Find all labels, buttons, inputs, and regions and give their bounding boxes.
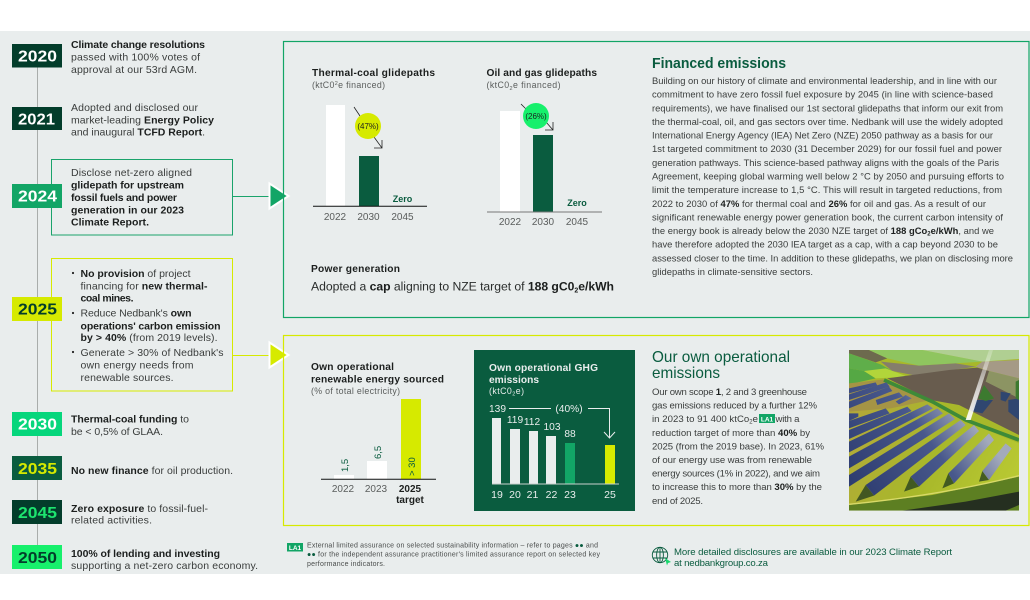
power generation: 2 <box>574 288 578 295</box>
timeline 2021: market-leading Energy Policy <box>71 114 214 126</box>
footer: LA1 limited assurance note: LA1 <box>289 545 302 552</box>
chart: own operational GHG emissions: 20 <box>509 489 521 501</box>
timeline 2030: be < 0,5% of GLAA. <box>71 426 163 438</box>
timeline 2021 <box>12 102 214 138</box>
text: own operational emissions body: gas emissions reduced by a further 12% <box>652 401 817 412</box>
chart: own operational GHG emissions: 139 <box>489 404 506 415</box>
timeline 2035 <box>12 456 233 480</box>
timeline 2045 <box>12 500 208 526</box>
timeline 2024 callout: fossil fuels and power <box>71 192 177 204</box>
chart: renewable energy sourced: 2023 <box>365 484 388 495</box>
timeline 2045: 2045 <box>18 505 57 522</box>
chart: own operational GHG emissions: 21 <box>527 489 538 501</box>
timeline 2030 <box>12 412 189 438</box>
text: financed emissions body: International Energy Agency (IEA) Net Zero (NZE) 2050 pathway as a basis for our <box>652 130 993 141</box>
timeline axis <box>36 60 38 550</box>
text: own operational emissions body: in 2023 to 91 400 ktCo <box>652 414 749 425</box>
text: own operational emissions body: 2025 (from the 2019 base). In 2023, 61% <box>652 441 824 452</box>
chart: thermal-coal glidepaths <box>312 68 435 223</box>
chart: own operational GHG emissions: 19 <box>491 489 503 501</box>
chart: thermal-coal glidepaths: e financed) <box>338 80 385 90</box>
text: financed emissions body: e/kWh <box>931 225 959 236</box>
chart: own operational GHG emissions: 112 <box>524 417 540 428</box>
chart: renewable energy sourced: 2022 <box>332 484 355 495</box>
text: financed emissions body: generation pathways. This science-based pathway aligns with the goals of the Paris <box>652 157 999 168</box>
chart: oil and gas glidepaths: (26%) <box>525 112 547 121</box>
text: financed emissions body: 1st targeted commitment to 2030 (31 December 2029) for our fossil fuel and power <box>652 143 1002 154</box>
timeline 2030: 2030 <box>18 416 57 434</box>
text: financed emissions body: glidepaths in climate-sensitive sectors. <box>652 266 813 277</box>
timeline 2025 callout: Generate > 30% of Nedbank's <box>80 347 224 359</box>
timeline 2020: passed with 100% votes of <box>71 52 200 64</box>
text: own operational emissions body: reduction target of more than 40% by <box>652 428 810 439</box>
timeline 2020: 2020 <box>18 48 57 66</box>
timeline 2024 callout: Disclose net-zero aligned <box>71 167 192 179</box>
text: own operational emissions body <box>652 387 824 507</box>
timeline 2024 callout: 2024 <box>18 188 57 206</box>
text: financed emissions body: requirements), we have finalised our 1st sectoral glidepaths that inform our exit from <box>652 102 1003 113</box>
text: own operational emissions body: energy sources (1% in 2022), and we aim <box>652 469 820 480</box>
text: financed emissions body: have therefore adopted the 2030 IEA target as a cap, with a cap beyond 2030 to be <box>652 239 998 250</box>
chart: oil and gas glidepaths: Zero <box>567 198 587 208</box>
footer: disclosure note: at nedbankgroup.co.za <box>674 558 769 569</box>
chart: renewable energy sourced: renewable energy sourced <box>311 375 444 386</box>
chart: thermal-coal glidepaths: 2022 <box>324 212 347 223</box>
arrow: 2024 to financed emissions <box>232 184 288 208</box>
chart: own operational GHG emissions: 2 <box>512 392 515 398</box>
chart: renewable energy sourced: 2025 <box>399 484 422 495</box>
timeline 2024 callout: generation in our 2023 <box>71 204 184 216</box>
chart: oil and gas glidepaths: 2022 <box>499 217 522 228</box>
timeline 2025 callout: operations' carbon emission <box>80 320 220 332</box>
timeline 2035: No new finance for oil production. <box>71 465 233 477</box>
chart: oil and gas glidepaths: 2045 <box>566 217 589 228</box>
chart: renewable energy sourced: > 30 <box>407 457 418 476</box>
heading: our own operational emissions: Our own operational <box>652 349 790 366</box>
text: own operational emissions body: e <box>753 414 758 425</box>
timeline 2025 callout: by > 40% (from 2019 levels). <box>80 332 218 344</box>
text: financed emissions body: 2022 to 2030 of 47% for thermal coal and 26% for oil and gas. As a result of our <box>652 198 986 209</box>
timeline 2021: 2021 <box>18 112 55 128</box>
panel: own operational emissions <box>284 336 1029 566</box>
chart: renewable energy sourced <box>311 362 444 506</box>
text: own operational emissions body: Our own scope 1, 2 and 3 greenhouse <box>652 387 807 398</box>
chart: own operational GHG emissions: 119 <box>507 415 523 426</box>
timeline 2021: and inaugural TCFD Report. <box>71 126 205 138</box>
timeline 2045: Zero exposure to fossil-fuel- <box>71 503 208 515</box>
timeline 2050: supporting a net-zero carbon economy. <box>71 560 258 572</box>
text: own operational emissions body: of our energy use was from renewable <box>652 455 812 466</box>
text: financed emissions body: , and we <box>958 225 994 236</box>
timeline 2050: 100% of lending and investing <box>71 548 220 560</box>
chart: renewable energy sourced: 6,5 <box>373 446 384 459</box>
timeline 2024 callout: glidepath for upstream <box>71 180 184 192</box>
text: financed emissions body: significant renewable energy power generation book, the current carbon intensity of <box>652 211 1003 222</box>
chart: own operational GHG emissions <box>474 350 635 511</box>
timeline 2025 callout: coal mines. <box>80 293 134 305</box>
text: financed emissions body: limit the temperature increase to 1,5 °C. This will result in targeted reductions, from <box>652 184 1002 195</box>
power generation <box>311 264 614 295</box>
text: own operational emissions body: with a <box>774 414 800 425</box>
chart: oil and gas glidepaths: e financed) <box>513 80 561 90</box>
timeline 2025 callout <box>12 258 232 391</box>
chart: own operational GHG emissions: 25 <box>604 489 616 501</box>
text: own operational emissions body: to increase this to more than 30% by the <box>652 482 822 493</box>
text: financed emissions body: commitment to have zero fossil fuel exposure by 2045 (in line with science-based <box>652 89 993 100</box>
chart: own operational GHG emissions: 88 <box>564 429 576 440</box>
chart: oil and gas glidepaths <box>486 68 602 228</box>
power generation: Power generation <box>311 264 400 275</box>
chart: thermal-coal glidepaths: Thermal-coal glidepaths <box>312 68 435 79</box>
chart: renewable energy sourced: 1,5 <box>340 459 351 472</box>
timeline 2025 callout: own energy needs from <box>80 360 194 372</box>
timeline 2025 callout: 2025 <box>18 302 57 318</box>
timeline 2030: Thermal-coal funding to <box>71 414 189 426</box>
panel: financed emissions <box>284 42 1029 318</box>
chart: own operational GHG emissions: emissions <box>489 375 539 386</box>
timeline 2020: Climate change resolutions <box>71 39 205 51</box>
timeline 2025 callout: Reduce Nedbank's own <box>80 308 192 320</box>
chart: thermal-coal glidepaths: 2 <box>335 81 338 87</box>
chart: thermal-coal glidepaths: 2045 <box>391 212 414 223</box>
chart: oil and gas glidepaths: (ktC0 <box>486 80 509 90</box>
heading: financed emissions: Financed emissions <box>652 55 786 72</box>
timeline 2021: Adopted and disclosed our <box>71 102 198 114</box>
text: financed emissions body: the thermal-coal, oil, and gas sectors over time. Nedbank will use the widely adopted <box>652 116 1003 127</box>
chart: own operational GHG emissions: 103 <box>544 422 561 433</box>
timeline 2045: related activities. <box>71 514 152 526</box>
timeline 2025 callout: financing for new thermal- <box>80 280 208 292</box>
footer: LA1 limited assurance note: ●● for the independent assurance practitioner's limited assurance report on selected key <box>307 552 600 558</box>
timeline 2025 callout: No provision of project <box>80 268 191 280</box>
text: financed emissions body: assessed closer to the time. In addition to these glidepaths, we plan on disclosing more <box>652 252 1013 263</box>
text: own operational emissions body: end of 2025. <box>652 496 703 507</box>
timeline 2035: 2035 <box>18 461 57 478</box>
timeline 2020: approval at our 53rd AGM. <box>71 64 197 76</box>
text: own operational emissions body: 2 <box>749 420 753 426</box>
chart: renewable energy sourced: target <box>396 495 425 506</box>
icon: globe <box>652 547 671 566</box>
chart: own operational GHG emissions: e) <box>516 386 524 396</box>
chart: thermal-coal glidepaths: 2030 <box>357 212 380 223</box>
power generation: Adopted a cap aligning to NZE target of 188 gC0 <box>311 280 574 294</box>
footer: disclosure note <box>674 547 952 569</box>
footer: disclosure note: More detailed disclosures are available in our 2023 Climate Report <box>674 547 952 558</box>
timeline 2024 callout: Climate Report. <box>71 217 149 229</box>
chart: own operational GHG emissions: Own operational GHG <box>489 363 598 374</box>
text: financed emissions body: 2 <box>927 232 931 238</box>
text: financed emissions body: Building on our history of climate and environmental leadership, and in line with our <box>652 75 997 86</box>
power generation: e/kWh <box>578 280 614 294</box>
chart: oil and gas glidepaths: Oil and gas glidepaths <box>486 68 597 79</box>
heading: our own operational emissions: emissions <box>652 365 720 382</box>
footer: LA1 limited assurance note <box>287 542 600 568</box>
chart: renewable energy sourced: (% of total electricity) <box>311 386 400 396</box>
text: financed emissions body: Agreement, keeping global warming well below 2 °C by 2050 and pursuing efforts to <box>652 170 1004 182</box>
footer: LA1 limited assurance note: External limited assurance on selected sustainability information – refer to pages ●● and <box>307 542 598 550</box>
timeline 2024 callout <box>12 160 232 235</box>
text: financed emissions body <box>652 75 1013 277</box>
chart: thermal-coal glidepaths: (ktC0 <box>312 80 334 90</box>
chart: oil and gas glidepaths: 2 <box>510 86 513 92</box>
chart: oil and gas glidepaths: 2030 <box>532 217 555 228</box>
chart: own operational GHG emissions: (40%) <box>555 404 583 415</box>
timeline 2050 <box>12 545 258 572</box>
arrow: 2025 to own operational emissions <box>232 342 288 368</box>
text: financed emissions body: the energy book is already below the 2030 NZE target of 188 gCo <box>652 225 927 236</box>
chart: own operational GHG emissions: 22 <box>546 489 557 501</box>
photo: solar farm aerial <box>849 350 1019 511</box>
chart: renewable energy sourced: Own operational <box>311 362 394 373</box>
chart: thermal-coal glidepaths: (47%) <box>357 122 379 131</box>
timeline 2025 callout: renewable sources. <box>80 372 174 384</box>
footer: LA1 limited assurance note: performance indicators. <box>307 561 385 568</box>
text: own operational emissions body: LA1 <box>761 416 774 424</box>
chart: own operational GHG emissions: (ktC0 <box>489 386 512 396</box>
chart: own operational GHG emissions: 23 <box>564 489 576 501</box>
timeline 2020 <box>12 39 205 76</box>
timeline 2050: 2050 <box>18 550 57 567</box>
chart: thermal-coal glidepaths: Zero <box>393 194 413 204</box>
heading: our own operational emissions <box>652 349 790 382</box>
